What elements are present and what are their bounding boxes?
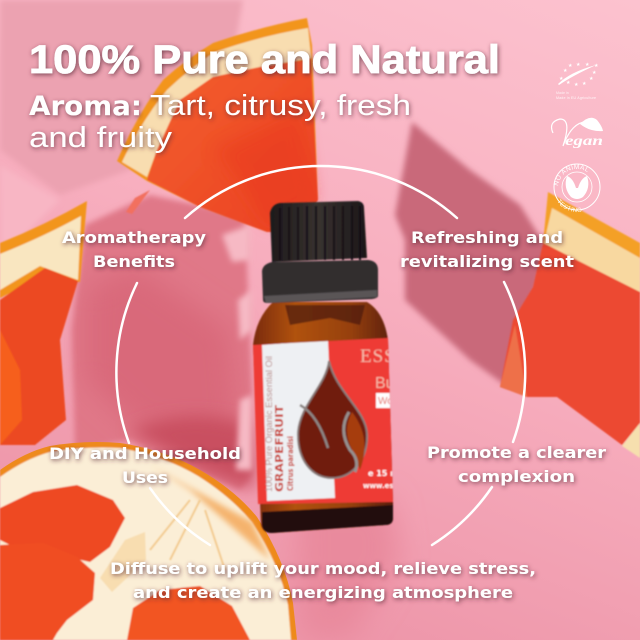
brand text: ESSEN bbox=[360, 346, 423, 367]
grapefruit slice: top bbox=[117, 18, 318, 232]
bottle base bbox=[262, 505, 393, 533]
icon: eu organic leaf bbox=[556, 62, 599, 100]
pith blush bbox=[160, 471, 271, 560]
icon: eu organic leaf: ★ bbox=[582, 81, 587, 87]
label vertical text: Citrus paradisi bbox=[286, 436, 295, 491]
icon: vegan: egan bbox=[565, 134, 603, 149]
shadow: bottom of fruit bbox=[130, 416, 255, 490]
fruit segment: upper bbox=[0, 485, 125, 562]
label red area bbox=[250, 335, 396, 507]
shadow: below bottle right bbox=[296, 500, 400, 640]
label: aromatherapy benefits: Aromatherapy bbox=[62, 228, 207, 247]
shadow: centre core bbox=[85, 265, 240, 440]
title: 100% Pure and Natural bbox=[29, 38, 500, 82]
aroma text: Aroma: bbox=[29, 91, 142, 122]
brand text bbox=[360, 348, 394, 490]
grapefruit slice: right bbox=[500, 192, 640, 458]
shadow: centre left bbox=[72, 195, 255, 490]
brand text: Wo bbox=[378, 396, 393, 407]
fruit segment: right bbox=[127, 586, 250, 640]
bottle glass bbox=[253, 302, 393, 533]
label: diy and household uses: Uses bbox=[122, 468, 168, 487]
icon: eu organic leaf: ★ bbox=[585, 62, 590, 68]
label: diffuse text: Diffuse to uplift your mood, relieve stress, bbox=[110, 559, 536, 578]
label vertical text: 100% Pure Organic Essential Oil bbox=[264, 356, 274, 492]
icon: eu organic leaf: ★ bbox=[563, 68, 568, 74]
label vertical text: GRAPEFRUIT bbox=[273, 404, 286, 492]
circular ring arcs bbox=[116, 166, 525, 545]
brand text: www.essen bbox=[363, 482, 407, 490]
icon: eu organic leaf: ★ bbox=[592, 70, 597, 76]
icon: eu organic leaf: ★ bbox=[566, 80, 571, 86]
cap bbox=[270, 201, 367, 262]
label: refreshing scent: Refreshing and bbox=[411, 228, 563, 247]
label: clearer complexion: complexion bbox=[458, 467, 575, 486]
icon: no animal testing bbox=[554, 164, 600, 212]
label: diy and household uses: DIY and Household bbox=[49, 444, 241, 463]
icon: eu organic leaf: Made in bbox=[556, 91, 569, 95]
label: aromatherapy benefits bbox=[62, 228, 207, 271]
icon: no animal testing: NO ANIMAL bbox=[554, 164, 588, 186]
icon: eu organic leaf: ★ bbox=[576, 62, 581, 68]
drop icon bbox=[298, 361, 367, 478]
brand text: e 15 ml bbox=[368, 469, 401, 478]
grapefruit half: bottom left bbox=[0, 440, 300, 640]
label white area bbox=[262, 340, 335, 501]
grapefruit slice: left bbox=[0, 201, 87, 445]
reflection: left of bottle bbox=[222, 225, 252, 470]
brand text: Bulk bbox=[375, 375, 407, 392]
label: diy and household uses bbox=[49, 444, 241, 487]
aroma text: and fruity bbox=[29, 122, 173, 154]
icon: eu organic leaf: ★ bbox=[589, 76, 594, 82]
shadow: upper right bbox=[395, 122, 548, 385]
label: clearer complexion bbox=[427, 443, 606, 486]
icon: eu organic leaf: ★ bbox=[559, 76, 564, 82]
label: diffuse text: and create an energizing atmosphere bbox=[133, 583, 513, 602]
icon: eu organic leaf: Made in EU Agriculture bbox=[556, 96, 596, 100]
fruit segment: lower bbox=[0, 543, 95, 640]
aroma text bbox=[29, 90, 411, 154]
aroma text: Tart, citrusy, fresh bbox=[150, 90, 411, 122]
essential oil bottle bbox=[252, 200, 394, 534]
label: diffuse text bbox=[110, 559, 536, 602]
icon: eu organic leaf: ★ bbox=[574, 82, 579, 88]
label: clearer complexion: Promote a clearer bbox=[427, 443, 606, 462]
label: refreshing scent bbox=[400, 228, 574, 271]
icon: no animal testing: TESTING bbox=[558, 198, 582, 212]
icon: eu organic leaf: ★ bbox=[568, 63, 573, 69]
cap collar bbox=[262, 260, 378, 303]
label bbox=[252, 337, 394, 505]
label: aromatherapy benefits: Benefits bbox=[93, 252, 175, 271]
icon: eu organic leaf: ★ bbox=[594, 63, 599, 69]
bottle shoulder dark band bbox=[285, 305, 365, 325]
label vertical text bbox=[264, 356, 295, 492]
icon: vegan bbox=[552, 118, 603, 149]
label: refreshing scent: revitalizing scent bbox=[400, 252, 574, 271]
